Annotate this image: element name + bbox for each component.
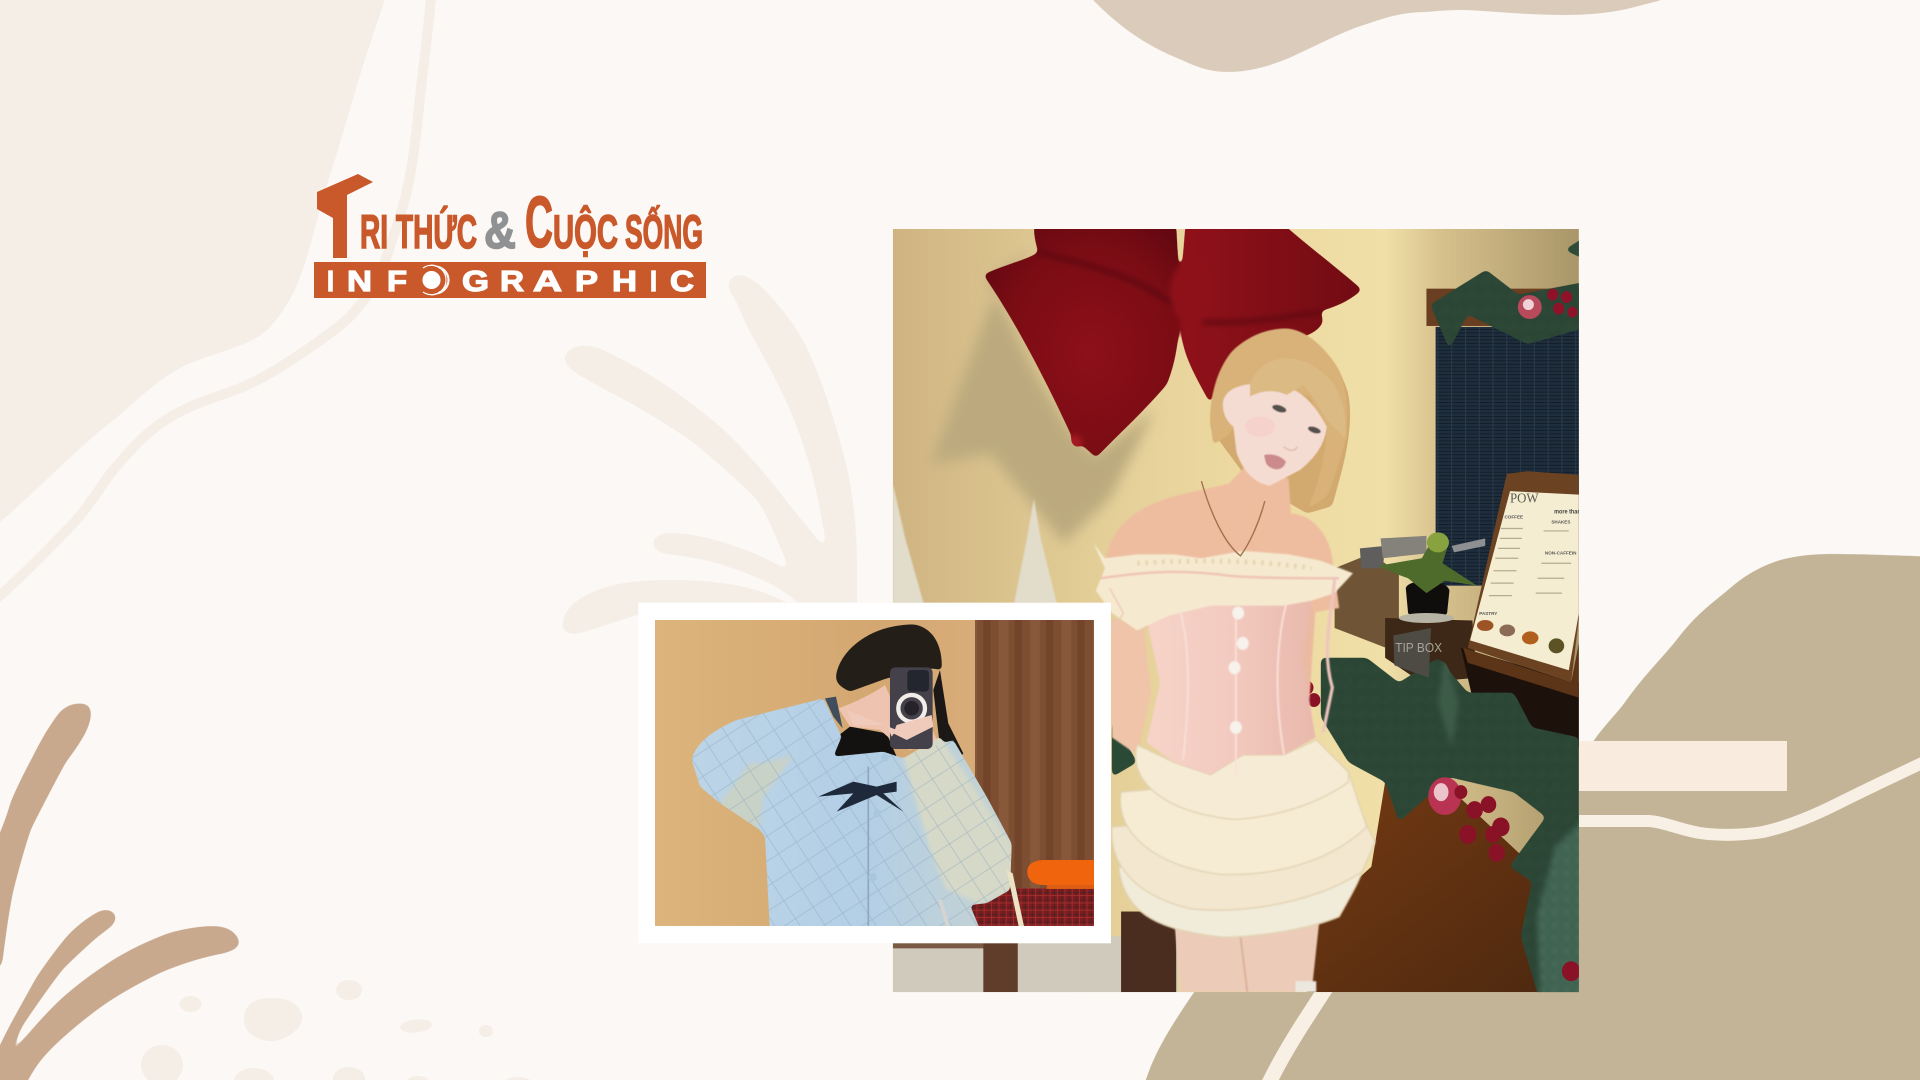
top-left contour line — [0, 0, 434, 622]
tip box: TIP BOX — [1395, 640, 1443, 655]
right khaki shape — [1125, 554, 1920, 1080]
peach caption bar — [1570, 741, 1787, 791]
white frame — [638, 603, 1111, 943]
dark furniture — [1335, 536, 1579, 747]
necklace — [1201, 481, 1265, 556]
bottom contour swoosh — [1268, 985, 1328, 1080]
wall — [655, 620, 1094, 926]
eyes — [1271, 403, 1287, 414]
logo infographic band: H — [612, 266, 637, 298]
scattered pale pebbles — [141, 980, 532, 1080]
logo wordmark — [360, 183, 703, 263]
logo globe swirl — [423, 265, 449, 295]
top-centre wave blob — [1070, 0, 1700, 72]
legs — [1174, 924, 1320, 992]
logo wordmark: RI THỨC — [360, 205, 477, 258]
logo infographic band: R — [500, 266, 524, 298]
menu board: NON-CAFFEIN — [1545, 550, 1577, 556]
cuff — [825, 697, 843, 728]
menu board: PASTRY — [1479, 611, 1498, 617]
lower-left skirting — [893, 912, 1178, 992]
logo infographic band: N — [347, 266, 372, 298]
cream strap — [1007, 870, 1024, 926]
cream ruffle neckline — [1094, 543, 1353, 732]
main photo: girl with red bow — [893, 225, 1596, 1006]
wall — [893, 229, 1579, 992]
hair — [834, 726, 896, 756]
logo infographic band: P — [575, 266, 598, 298]
logo wordmark: SỐNG — [625, 205, 703, 258]
berries — [1301, 289, 1580, 981]
logo infographic band: C — [670, 266, 694, 298]
girl's back hair — [1210, 375, 1350, 513]
bangs — [1250, 358, 1346, 438]
hand behind phone — [838, 685, 937, 750]
leather beret — [836, 624, 942, 692]
tip box — [1393, 628, 1443, 678]
tiered skirt — [1112, 740, 1375, 937]
menu board — [1468, 471, 1581, 683]
blush — [1245, 417, 1275, 437]
curtain — [975, 620, 1094, 890]
wood trim — [1426, 289, 1579, 326]
glitter trees — [893, 484, 1057, 603]
logo infographic band: A — [533, 266, 562, 298]
right contour swoosh — [1570, 757, 1920, 835]
pine garland — [1112, 230, 1596, 1006]
logo infographic band: I — [327, 266, 334, 298]
logo wordmark: & — [484, 202, 516, 260]
potted plant — [1378, 532, 1477, 623]
menu board: more than — [1554, 509, 1581, 516]
jacket quilting and placket — [692, 698, 1012, 933]
logo big T mark — [317, 174, 373, 258]
nose and lips — [1283, 447, 1297, 450]
skin — [1223, 383, 1327, 486]
phone — [890, 667, 933, 749]
orange lamp — [1027, 860, 1100, 889]
menu board: COFFEE — [1505, 514, 1523, 521]
pink corset — [1144, 588, 1315, 775]
face detail — [1210, 328, 1347, 510]
tan leaf sprig bottom-left — [0, 703, 240, 1080]
plaid table — [970, 888, 1094, 926]
logo infographic band: G — [462, 266, 489, 298]
menu board: POW — [1510, 490, 1539, 506]
menu board: SHAKES — [1551, 519, 1570, 526]
logo infographic band: I — [650, 266, 657, 298]
shoulders and arms — [1105, 464, 1339, 755]
blind — [1436, 327, 1579, 586]
logo: Tri Thức & Cuộc Sống Infographic — [314, 174, 706, 298]
wood floor — [1307, 782, 1579, 992]
logo wordmark: UỘC — [553, 205, 618, 258]
fingers over phone — [847, 710, 933, 740]
bow shadow — [931, 250, 1156, 543]
logo infographic band — [314, 262, 706, 298]
bow — [983, 225, 1362, 458]
inset photo with white frame — [638, 603, 1111, 943]
pale leaf sprig behind photos — [562, 275, 857, 634]
hair — [1210, 328, 1347, 510]
logo wordmark: C — [525, 183, 553, 263]
top-left organic blob — [0, 0, 385, 555]
logo infographic band: F — [387, 266, 407, 298]
navy ribbon bow — [818, 782, 903, 812]
quilted jacket — [692, 698, 1012, 933]
